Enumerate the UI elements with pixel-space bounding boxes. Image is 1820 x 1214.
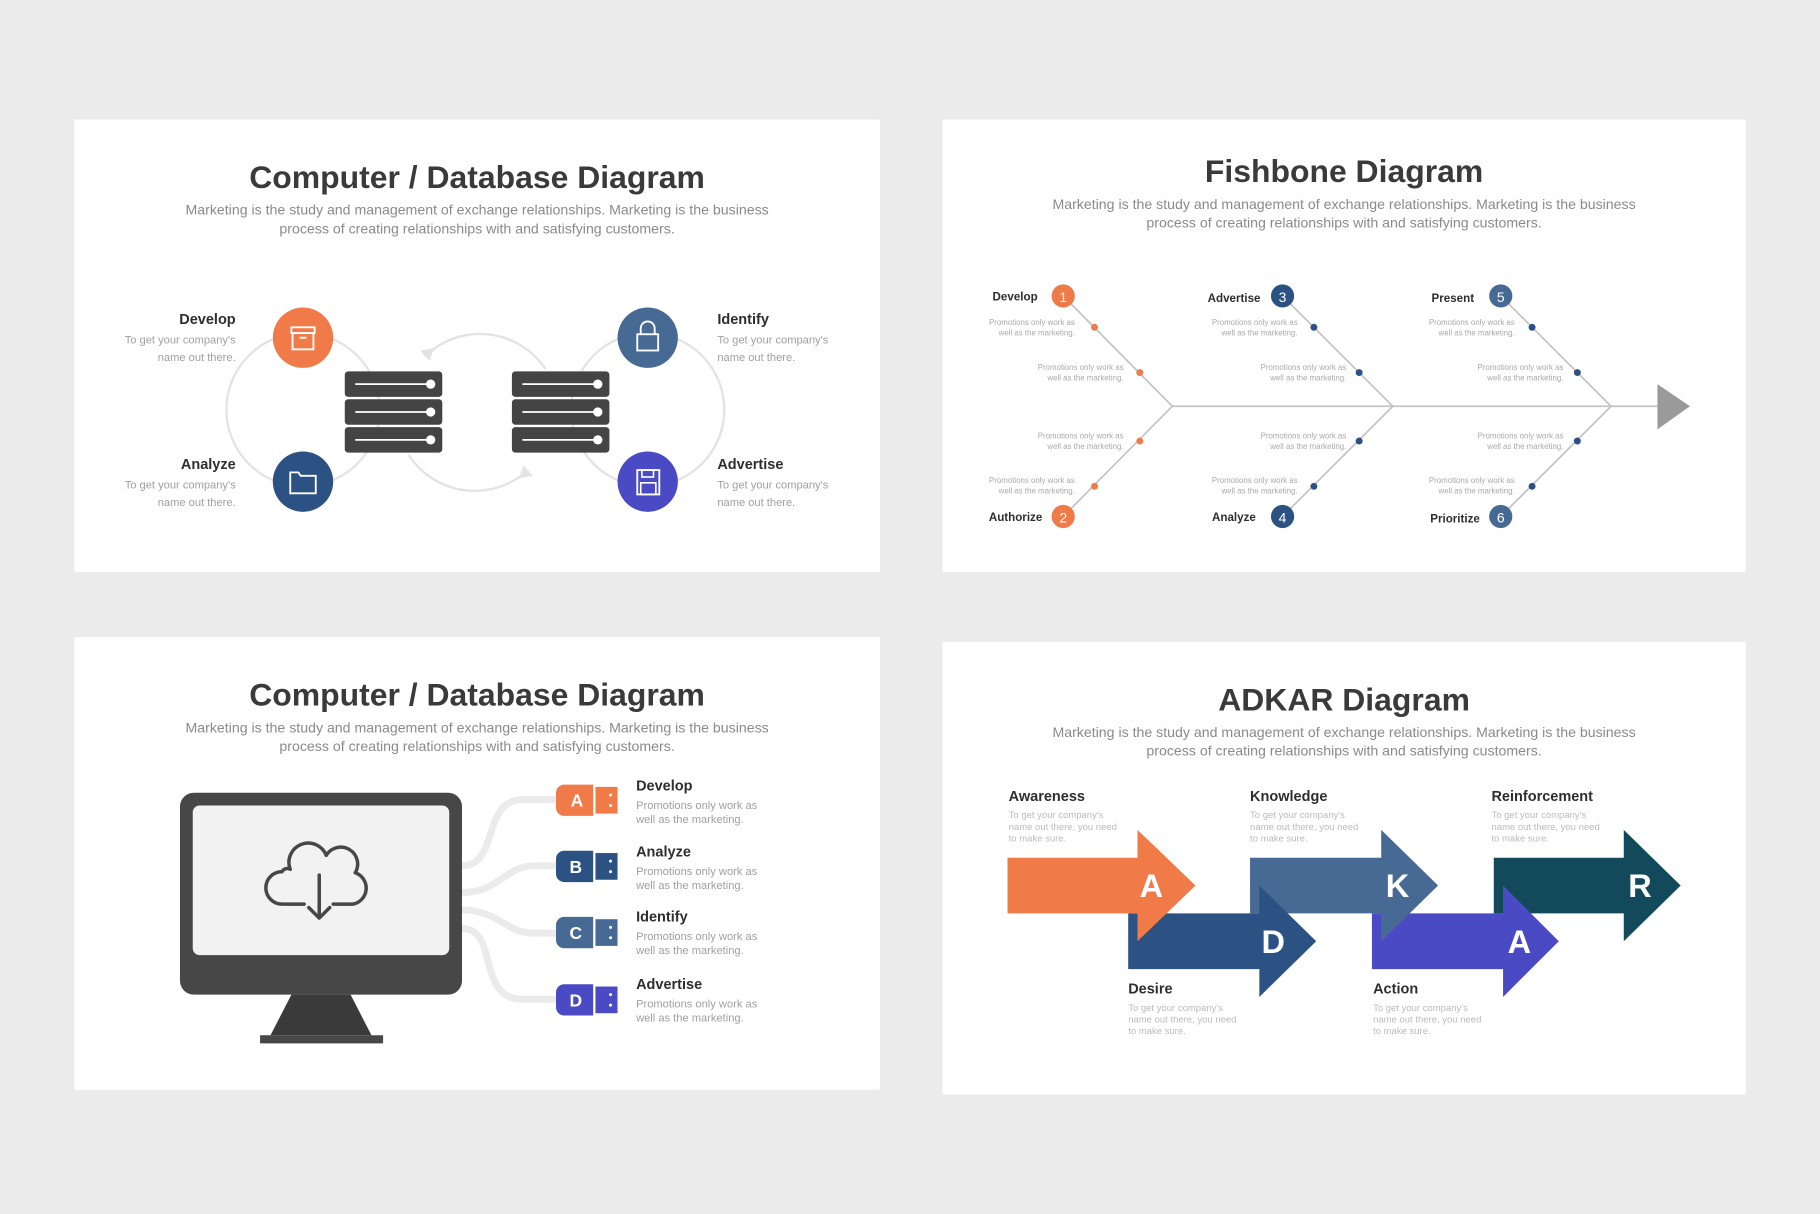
connectors: C <box>569 923 582 943</box>
labels: To get your company's <box>125 335 236 347</box>
numbered nodes: 5 <box>1497 289 1505 305</box>
labels: Identify <box>636 910 688 926</box>
bone labels: Prioritize <box>1430 512 1480 525</box>
arrows: R <box>1628 868 1652 904</box>
panel: computer database diagram 1: Identify <box>717 312 769 328</box>
icon: develop box <box>273 308 333 368</box>
bone notes: Promotions only work as <box>1212 476 1298 485</box>
bone notes: Promotions only work as <box>1478 432 1563 441</box>
bone notes: Promotions only work as <box>1429 318 1515 327</box>
title: Computer / Database Diagram <box>249 677 705 713</box>
bone labels <box>989 291 1480 525</box>
panel: computer database diagram 1 <box>74 120 880 572</box>
bone notes: Promotions only work as <box>1212 318 1298 327</box>
bone labels: Analyze <box>1212 511 1256 524</box>
bone notes: well as the marketing. <box>998 486 1075 495</box>
labels: Promotions only work as <box>636 931 758 943</box>
arrows: A <box>1508 924 1531 960</box>
labels: Analyze <box>636 845 691 861</box>
labels: Promotions only work as <box>636 866 758 878</box>
labels: name out there, you need <box>1128 1014 1236 1025</box>
numbered nodes <box>1052 284 1512 528</box>
bone notes: well as the marketing. <box>1046 374 1124 383</box>
spine and bones <box>1063 296 1662 516</box>
labels: well as the marketing. <box>635 814 744 826</box>
icon: analyze folder <box>273 451 333 512</box>
bone notes: Promotions only work as <box>1038 432 1124 441</box>
subtitle: Marketing is the study and management of exchange relationships. Marketing is the business <box>185 719 769 735</box>
connectors <box>556 785 618 1016</box>
labels: To get your company's <box>125 480 236 492</box>
labels: to make sure. <box>1009 833 1066 844</box>
panel: computer database diagram 2 <box>74 637 880 1090</box>
labels: Develop <box>179 312 236 328</box>
bone notes: well as the marketing. <box>1486 374 1563 383</box>
cables <box>462 800 557 999</box>
server stacks <box>345 371 609 453</box>
bone notes: Promotions only work as <box>989 476 1075 485</box>
labels: To get your company's <box>1009 810 1104 821</box>
labels: To get your company's <box>1128 1003 1223 1014</box>
bone notes: well as the marketing. <box>1269 374 1346 383</box>
title: ADKAR Diagram <box>1218 681 1470 717</box>
labels: to make sure. <box>1250 833 1308 844</box>
labels: Promotions only work as <box>636 800 758 812</box>
subtitle: Marketing is the study and management of exchange relationships. Marketing is the business <box>1052 196 1636 212</box>
labels: Awareness <box>1009 789 1085 805</box>
bone notes: Promotions only work as <box>989 318 1075 327</box>
bone notes: well as the marketing. <box>1046 442 1124 451</box>
labels: name out there, you need <box>1250 822 1358 833</box>
subtitle: process of creating relationships with and satisfying customers. <box>279 738 675 754</box>
arrows: K <box>1386 868 1410 904</box>
labels: name out there, you need <box>1373 1014 1481 1025</box>
numbered nodes: 4 <box>1279 509 1287 525</box>
panel: fishbone diagram <box>942 120 1746 572</box>
bone labels: Authorize <box>989 511 1043 524</box>
labels: Analyze <box>181 457 236 473</box>
bone labels: Develop <box>993 291 1038 304</box>
icon: monitor <box>180 793 462 1043</box>
numbered nodes: 1 <box>1059 289 1067 305</box>
bone labels: Advertise <box>1208 292 1261 305</box>
icon: identify lock <box>618 308 678 368</box>
bone notes: Promotions only work as <box>1038 363 1124 372</box>
arrows: A <box>1140 868 1163 904</box>
labels: well as the marketing. <box>635 945 744 957</box>
labels: well as the marketing. <box>635 1012 744 1024</box>
bone notes: Promotions only work as <box>1429 476 1515 485</box>
connectors: D <box>569 990 582 1010</box>
labels: Develop <box>636 778 693 794</box>
bone notes: well as the marketing. <box>1486 442 1563 451</box>
subtitle: Marketing is the study and management of exchange relationships. Marketing is the business <box>185 202 769 218</box>
labels: Reinforcement <box>1491 789 1593 805</box>
bone notes <box>989 318 1563 495</box>
subtitle: Marketing is the study and management of exchange relationships. Marketing is the business <box>1052 724 1636 740</box>
labels: Action <box>1373 981 1418 997</box>
subtitle: process of creating relationships with and satisfying customers. <box>1146 743 1542 759</box>
bone notes: well as the marketing. <box>1438 328 1515 337</box>
labels: name out there. <box>158 352 236 364</box>
connectors: A <box>571 791 584 811</box>
title: Computer / Database Diagram <box>249 159 705 195</box>
bone labels: Present <box>1432 292 1474 305</box>
panel: computer database diagram 1: name out there. <box>717 352 795 364</box>
labels: To get your company's <box>1373 1003 1468 1014</box>
numbered nodes: 2 <box>1059 509 1067 525</box>
numbered nodes: 6 <box>1497 509 1505 525</box>
labels: To get your company's <box>1491 810 1586 821</box>
labels <box>125 312 236 509</box>
panel: ADKAR diagram <box>942 642 1746 1094</box>
arrow head <box>1657 384 1690 429</box>
subtitle: process of creating relationships with and satisfying customers. <box>1146 214 1542 230</box>
labels: Knowledge <box>1250 789 1327 805</box>
panel: computer database diagram 1: To get your company's <box>717 480 829 492</box>
labels: Advertise <box>636 977 702 993</box>
labels: to make sure. <box>1491 833 1549 844</box>
panel: computer database diagram 1: Advertise <box>717 457 783 473</box>
arrows: D <box>1262 924 1285 960</box>
bone notes: well as the marketing. <box>1438 486 1515 495</box>
arrows <box>1007 830 1681 997</box>
bone notes: well as the marketing. <box>1220 328 1298 337</box>
connectors: B <box>569 857 582 877</box>
panel: computer database diagram 1: name out there. <box>717 497 795 509</box>
labels <box>1009 789 1600 1037</box>
bone notes: Promotions only work as <box>1261 363 1346 372</box>
panel: computer database diagram 1: To get your company's <box>717 335 829 347</box>
labels: to make sure. <box>1128 1026 1186 1037</box>
labels: to make sure. <box>1373 1026 1431 1037</box>
labels: Desire <box>1128 981 1173 997</box>
bone notes: Promotions only work as <box>1261 432 1346 441</box>
rings <box>226 333 724 491</box>
bone notes: well as the marketing. <box>998 328 1075 337</box>
labels: To get your company's <box>1250 810 1345 821</box>
bone notes: well as the marketing. <box>1269 442 1346 451</box>
subtitle: process of creating relationships with and satisfying customers. <box>279 220 675 236</box>
title: Fishbone Diagram <box>1205 153 1483 189</box>
labels: Promotions only work as <box>636 998 758 1010</box>
numbered nodes: 3 <box>1279 289 1287 305</box>
icon: advertise floppy <box>618 451 678 512</box>
labels: name out there. <box>158 497 236 509</box>
labels: name out there, you need <box>1009 822 1117 833</box>
bone notes: well as the marketing. <box>1220 486 1298 495</box>
labels: well as the marketing. <box>635 880 744 892</box>
bone notes: Promotions only work as <box>1478 363 1563 372</box>
labels: name out there, you need <box>1491 822 1600 833</box>
icon: cloud download <box>266 843 366 918</box>
bone dots <box>1091 324 1143 490</box>
labels <box>635 778 758 1024</box>
